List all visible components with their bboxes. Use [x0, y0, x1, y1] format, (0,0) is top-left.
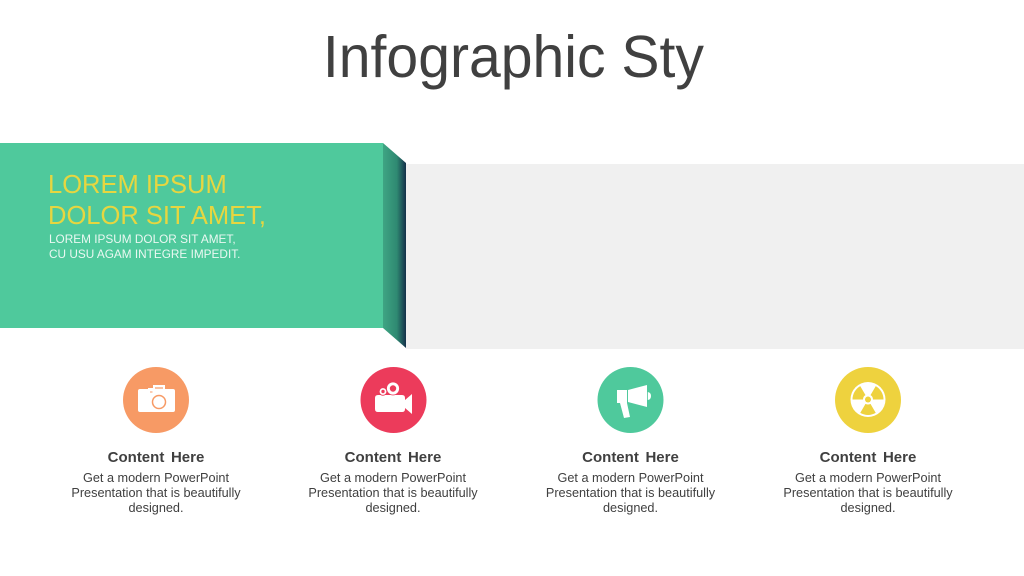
icon: radiation	[835, 367, 901, 433]
column 3 text: Presentation that is beautifully	[546, 486, 715, 500]
panel: green banner	[0, 143, 383, 328]
column 1 text: Get a modern PowerPoint	[83, 471, 229, 485]
column 4 text	[783, 449, 953, 515]
column 2 text	[308, 449, 478, 515]
panel: grey content area	[406, 164, 1024, 349]
column 3 text: Content Here	[582, 449, 679, 466]
column 3 text: designed.	[603, 501, 658, 515]
banner text: CU USU AGAM INTEGRE IMPEDIT.	[49, 246, 240, 260]
column 4 text: Get a modern PowerPoint	[795, 471, 941, 485]
title: Infographic Sty	[323, 23, 704, 90]
column 1 text: designed.	[128, 501, 184, 515]
column 4 text: Content Here	[820, 449, 916, 466]
icon: megaphone	[598, 367, 664, 433]
banner text	[49, 232, 240, 260]
column 4 text: Presentation that is beautifully	[783, 486, 953, 500]
banner heading	[48, 169, 266, 230]
banner text: LOREM IPSUM DOLOR SIT AMET,	[49, 232, 236, 246]
column 3 text: Get a modern PowerPoint	[558, 471, 703, 485]
column 3 text	[546, 449, 715, 515]
column 1 text	[71, 449, 241, 515]
column 4 text: designed.	[840, 501, 896, 515]
column 1 text: Presentation that is beautifully	[71, 486, 241, 500]
panel: green ribbon fold	[383, 143, 406, 348]
column 1 text: Content Here	[108, 449, 204, 466]
column 2 text: Get a modern PowerPoint	[320, 471, 466, 485]
column 2 text: Content Here	[345, 449, 441, 466]
icon: video camera	[360, 367, 426, 433]
banner heading: DOLOR SIT AMET,	[48, 200, 266, 230]
column 2 text: designed.	[365, 501, 421, 515]
icon: camera	[123, 367, 189, 433]
banner heading: LOREM IPSUM	[48, 169, 227, 199]
column 2 text: Presentation that is beautifully	[308, 486, 478, 500]
